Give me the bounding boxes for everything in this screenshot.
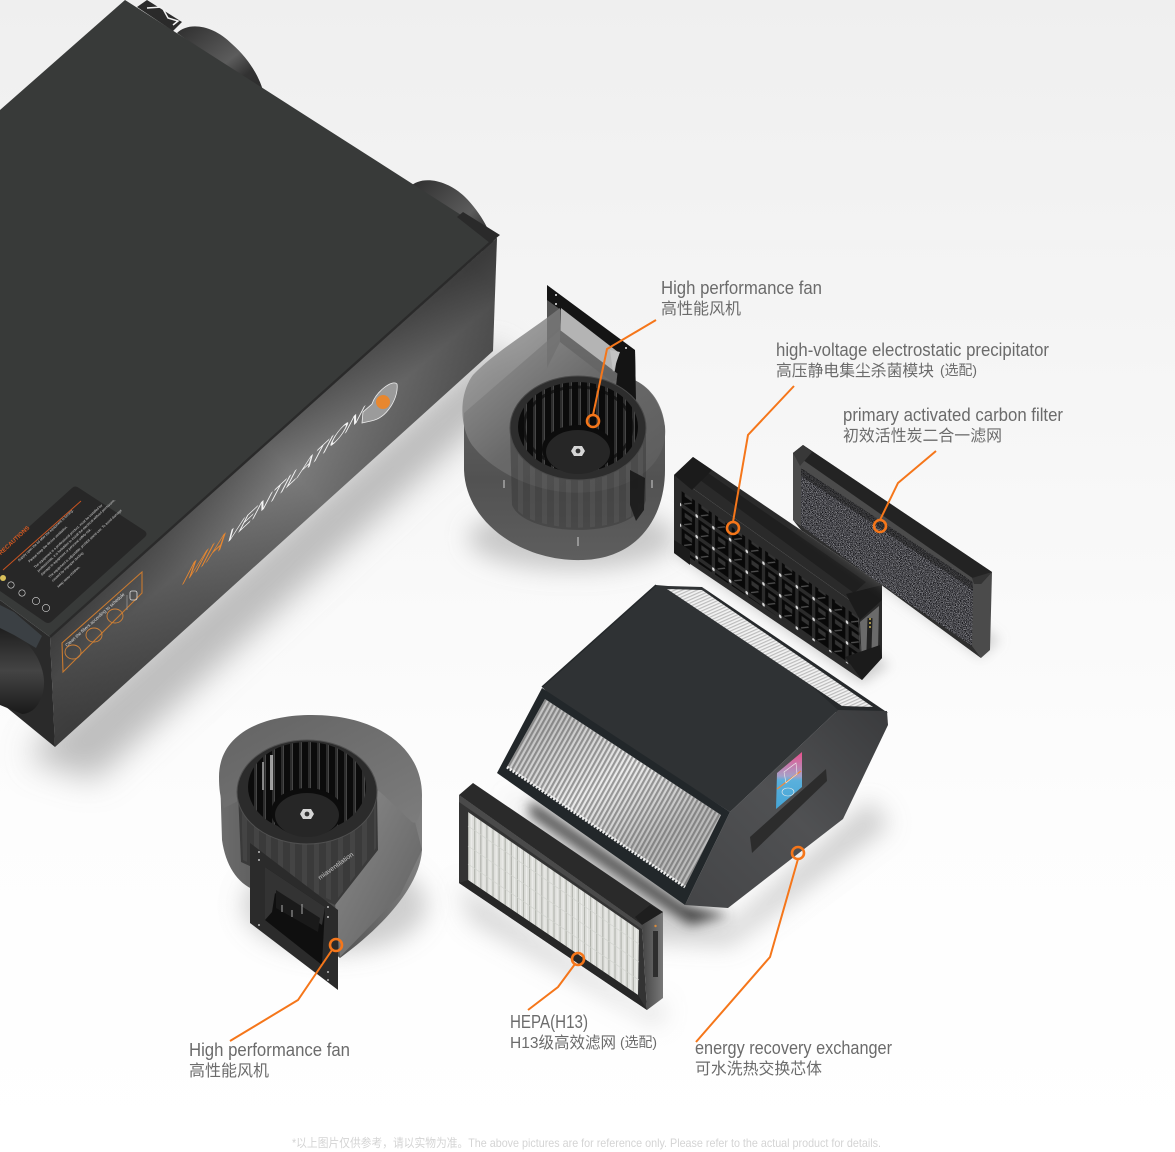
flange seen through lid — [547, 300, 636, 400]
label: lower fan: High performance fan — [189, 1040, 350, 1060]
label text — [0, 470, 133, 605]
lower fan ring — [237, 740, 377, 844]
brand logo: VENTILATION — [219, 399, 370, 554]
label: carbon filter: 初效活性炭二合一滤网 — [843, 427, 1002, 445]
fan impeller drum — [510, 430, 646, 530]
lower fan hub — [271, 788, 343, 836]
label rule — [3, 501, 81, 570]
carbon foam — [801, 468, 973, 646]
HEPA front frame — [459, 795, 647, 1010]
top face — [0, 0, 497, 637]
filter cleaning notice: Clean the filters according to schedule — [64, 592, 126, 648]
exchanger front core — [507, 699, 721, 887]
fan flange — [547, 285, 636, 402]
label: lower fan: 高性能风机 — [189, 1062, 269, 1080]
label text: caused by improper ducting. — [51, 551, 85, 583]
main ventilation unit — [0, 0, 525, 780]
precipitator face grid — [674, 475, 862, 680]
callout: electrostatic precipitator — [727, 340, 1049, 534]
carbon top — [793, 445, 992, 584]
exchanger handle — [750, 769, 827, 853]
precipitator end — [858, 585, 882, 680]
lower fan shadow — [243, 857, 427, 953]
carbon shadow — [793, 520, 1000, 658]
exchanger shadow — [500, 790, 890, 945]
lower fan — [219, 715, 427, 990]
lower fan lid — [219, 715, 422, 823]
brand logo: MIA — [176, 520, 236, 595]
callout: carbon filter — [843, 405, 1063, 532]
side face — [50, 238, 497, 747]
mounting brackets — [137, 0, 500, 243]
label: upper fan — [661, 278, 822, 318]
footnote: *以上图片仅供参考，请以实物为准。The above pictures are for reference only. Please refer to the actual product for details. — [292, 1135, 881, 1150]
callout: lower fan — [189, 939, 350, 1080]
exchanger sticker — [776, 752, 802, 809]
precautions label — [0, 470, 147, 623]
upper fan — [462, 285, 676, 570]
label text: damage to equipment or personal safety risk. — [40, 527, 92, 577]
label text: Supply open the lid after the equipment is turning. — [17, 508, 74, 562]
HEPA end — [642, 912, 663, 1010]
exchanger top face — [542, 585, 838, 812]
label: exchanger: energy recovery exchanger — [695, 1038, 892, 1058]
fan ring — [510, 376, 646, 480]
lower fan blades — [248, 742, 366, 832]
label text: professionals, it is forbidden to install the electrical without permission. — [36, 498, 116, 573]
exchanger underside — [530, 800, 730, 925]
HEPA end label — [653, 925, 658, 977]
lower fan brand: miaventilation — [317, 851, 355, 882]
hub nut — [571, 446, 585, 456]
filter cleaning notice — [62, 572, 142, 672]
unit shadow — [30, 345, 525, 780]
brand logo — [176, 383, 397, 595]
duct collars at top — [177, 26, 495, 262]
fan hub — [542, 425, 614, 473]
label: upper fan: High performance fan — [661, 278, 822, 298]
callout: HEPA — [510, 953, 657, 1052]
label: HEPA: (选配) — [620, 1034, 657, 1050]
fan shadow — [468, 506, 676, 570]
label text: Please keep the device ventilation. — [28, 525, 69, 563]
label: HEPA: HEPA(H13) — [510, 1012, 588, 1032]
precipitator top — [674, 457, 882, 606]
label: upper fan: 高性能风机 — [661, 300, 741, 318]
label text: keep away children. — [56, 565, 81, 588]
label: precipitator: 高压静电集尘杀菌模块 — [776, 362, 934, 380]
electrostatic precipitator filter — [674, 457, 890, 684]
label: exchanger: 可水洗热交换芯体 — [695, 1060, 822, 1078]
HEPA core — [468, 812, 639, 995]
left end with duct — [0, 600, 55, 747]
precipitator shadow — [674, 540, 890, 684]
exchanger front frame — [497, 688, 730, 905]
carbon corners — [793, 445, 812, 466]
precipitator corners — [674, 457, 882, 680]
label: carbon filter — [843, 405, 1063, 445]
fan body — [464, 330, 665, 560]
fan blades — [518, 382, 638, 472]
callout: upper fan — [587, 278, 822, 427]
exchanger right face — [685, 710, 888, 908]
label icons — [0, 575, 50, 612]
exchanger right frame — [702, 587, 888, 714]
label: carbon filter: primary activated carbon filter — [843, 405, 1063, 425]
logo emblem — [362, 383, 397, 423]
label: precipitator: high-voltage electrostatic precipitator — [776, 340, 1049, 360]
lower fan body — [220, 770, 422, 958]
carbon lower rail — [793, 520, 981, 658]
energy recovery exchanger — [497, 585, 890, 945]
lower hub nut — [300, 809, 314, 819]
label: HEPA: H13级高效滤网 — [510, 1034, 616, 1052]
lower fan volute right — [335, 790, 422, 957]
HEPA filter — [459, 783, 663, 1025]
carbon frame — [793, 445, 992, 658]
label text: The equipment is a professional product, must be installed by — [33, 503, 103, 569]
dark duct strip seen through body — [630, 470, 645, 521]
label text: The equipment is adjustable, prohibit stand-use. To avoid damage — [48, 508, 123, 579]
label: lower fan — [189, 1040, 350, 1080]
label: HEPA — [510, 1012, 657, 1052]
lower fan flange — [250, 843, 338, 990]
HEPA shadow — [459, 883, 663, 1025]
lower fan drum — [238, 792, 378, 905]
fan lid — [462, 308, 665, 493]
label: precipitator: (选配) — [940, 362, 977, 378]
carbon filter — [793, 445, 1000, 658]
exchanger top stripe filter — [667, 589, 873, 707]
callout: exchanger — [695, 847, 892, 1078]
lower fan highlights — [504, 480, 652, 546]
label: exchanger — [695, 1038, 892, 1078]
label: precipitator — [776, 340, 1049, 380]
HEPA top — [459, 783, 663, 925]
